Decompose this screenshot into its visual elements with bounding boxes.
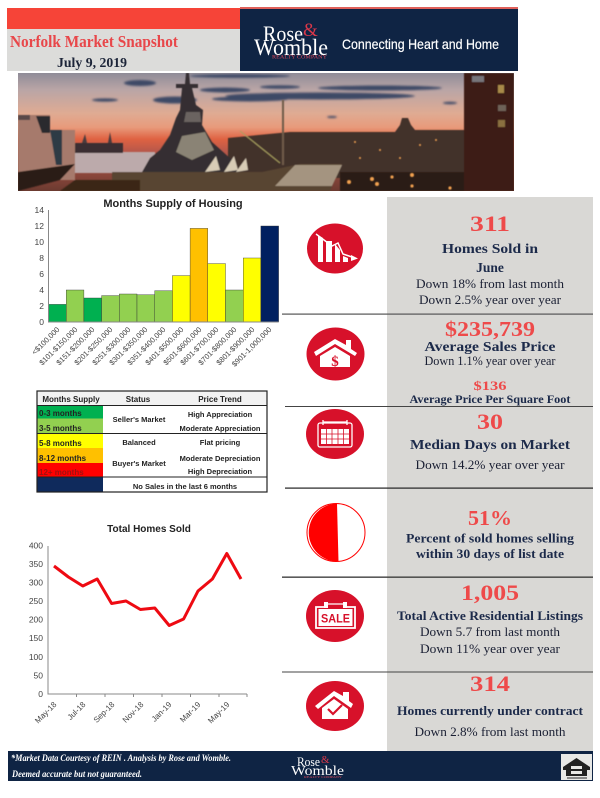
bar chart: months supply of housing: 8 — [39, 253, 44, 263]
bar chart: months supply of housing: $301-$350,000 — [107, 325, 149, 367]
icon: house with dollar sign: $ — [331, 354, 339, 370]
line chart: total homes sold: May-19 — [206, 700, 232, 725]
legend table: No Sales in the last 6 months — [133, 482, 237, 491]
logo: REALTY COMPANY — [272, 54, 327, 60]
legend table: Balanced — [122, 438, 156, 447]
icon: house with check — [306, 681, 364, 731]
line chart: total homes sold: 0 — [38, 689, 43, 699]
metric: under contract — [306, 671, 584, 739]
title: Norfolk Market Snapshot — [10, 32, 178, 51]
legend table: Status — [126, 395, 151, 404]
line chart: total homes sold: 200 — [29, 614, 43, 624]
line chart: total homes sold: 250 — [29, 596, 43, 606]
legend table: High Depreciation — [188, 467, 252, 476]
line chart: total homes sold: 400 — [29, 540, 43, 550]
metric: median days on market: Down 14.2% year over year — [416, 457, 565, 472]
logo: Womble — [254, 35, 328, 60]
line chart: total homes sold: 150 — [29, 633, 43, 643]
metric: homes sold: 311 — [470, 211, 510, 236]
bar chart: months supply of housing: $151-$200,000 — [54, 325, 96, 367]
chart title: Total Homes Sold — [107, 524, 191, 535]
metric: active listings: Total Active Residential Listings — [397, 609, 583, 623]
bar chart: months supply of housing — [30, 198, 279, 369]
icon: pie 51% — [307, 504, 365, 562]
metric: homes sold: Down 18% from last month — [416, 276, 565, 291]
footer logo: REALTY COMPANY — [304, 775, 343, 779]
date: July 9, 2019 — [57, 56, 127, 71]
hull — [112, 164, 342, 191]
metric: under contract: Homes currently under contract — [397, 704, 584, 718]
bar chart: months supply of housing: $801-$900,000 — [214, 325, 256, 367]
logo — [254, 20, 328, 60]
footer logo: Rose — [297, 754, 320, 769]
legend table: Moderate Depreciation — [180, 454, 261, 463]
metric: average sales price: Down 1.1% year over year — [424, 354, 556, 368]
mid buildings — [228, 118, 464, 178]
logo: Rose — [263, 21, 303, 46]
metric: active listings: Down 11% year over year — [420, 641, 561, 656]
disclaimer — [11, 753, 231, 779]
footer logo: Womble — [291, 764, 344, 779]
logo: & — [303, 20, 318, 41]
bar chart: months supply of housing: $351-$400,000 — [125, 325, 167, 367]
metric: median days on market: 30 — [477, 409, 503, 434]
legend table: Price Trend — [198, 395, 242, 404]
line chart: total homes sold — [29, 524, 247, 725]
disclaimer: *Market Data Courtesy of REIN . Analysis by Rose and Womble. — [11, 753, 231, 763]
bar chart: months supply of housing: 6 — [39, 269, 44, 279]
line chart: total homes sold: Jul-18 — [66, 700, 88, 722]
bar chart: months supply of housing: $901-1,000,000 — [230, 325, 273, 369]
legend table: 5-8 months — [39, 439, 82, 448]
metric: homes sold: June — [476, 260, 504, 275]
bar chart: months supply of housing: $701-$800,000 — [196, 325, 238, 367]
bar chart: months supply of housing: <$100,000 — [30, 325, 61, 357]
metric: homes sold: Down 2.5% year over year — [419, 292, 562, 307]
right column background — [387, 197, 593, 751]
metric: active listings: 1,005 — [461, 580, 519, 605]
metric: percent selling within 30 days: Percent of sold homes selling — [406, 532, 575, 546]
header left panel — [7, 8, 240, 71]
header right banner — [240, 7, 518, 71]
line chart: total homes sold: May-18 — [33, 700, 59, 725]
ship superstructure — [142, 73, 240, 172]
bar chart: months supply of housing: 10 — [35, 237, 44, 247]
tagline: Connecting Heart and Home — [342, 36, 499, 52]
bar chart: months supply of housing: $101-$150,000 — [37, 325, 79, 367]
legend table: 0-3 months — [39, 409, 82, 418]
legend table: Seller's Market — [113, 415, 166, 424]
line chart: total homes sold: Sep-18 — [92, 700, 117, 725]
bar chart: months supply of housing: 0 — [39, 317, 44, 327]
legend table: Moderate Appreciation — [180, 424, 261, 433]
metric: percent selling within 30 days: within 30 days of list date — [416, 547, 564, 561]
legend table — [37, 391, 267, 492]
footer — [8, 751, 593, 781]
quay — [340, 172, 464, 191]
metric: active listings: Down 5.7 from last month — [420, 624, 561, 639]
bar chart: months supply of housing: 4 — [39, 285, 44, 295]
legend table: 8-12 months — [39, 454, 87, 463]
footer logo — [291, 754, 344, 779]
bar chart: months supply of housing: $251-$300,000 — [90, 325, 132, 367]
icon: house with dollar sign — [306, 328, 364, 380]
metric: average sales price — [306, 317, 571, 406]
metric: average sales price: Average Price Per Square Foot — [410, 394, 571, 406]
legend table: 12+ months — [39, 468, 84, 477]
disclaimer: Deemed accurate but not guaranteed. — [11, 769, 142, 779]
metric: under contract: Down 2.8% from last month — [414, 724, 566, 739]
chart title: Months Supply of Housing — [103, 198, 243, 210]
bar chart: months supply of housing: $601-$700,000 — [178, 325, 220, 367]
metric: average sales price: Average Sales Price — [424, 339, 556, 354]
legend table: Months Supply — [42, 395, 100, 404]
legend table: Flat pricing — [200, 438, 241, 447]
bar chart: months supply of housing: $501-$600,000 — [161, 325, 203, 367]
metric: median days on market — [306, 409, 571, 472]
line chart: total homes sold: Jan-19 — [150, 700, 174, 724]
metric: percent selling within 30 days — [307, 504, 575, 562]
photo: battleship at sunset — [18, 73, 514, 191]
bar chart: months supply of housing: 14 — [35, 205, 44, 215]
legend table: Buyer's Market — [112, 459, 166, 468]
metric: percent selling within 30 days: 51% — [468, 506, 512, 530]
icon: falling bars — [307, 224, 363, 274]
line chart: total homes sold: 350 — [29, 559, 43, 569]
legend table: 3-5 months — [39, 424, 82, 433]
left building — [18, 115, 75, 180]
metric: homes sold: Homes Sold in — [442, 241, 539, 256]
bar chart: months supply of housing: 12 — [35, 221, 44, 231]
metric: under contract: 314 — [470, 671, 510, 696]
metric: median days on market: Median Days on Market — [410, 437, 571, 452]
icon: sale sign — [306, 590, 364, 642]
line chart: total homes sold: Mar-19 — [178, 700, 203, 724]
legend table: High Appreciation — [188, 410, 253, 419]
line chart: total homes sold: 50 — [34, 670, 43, 680]
metric: homes sold — [307, 211, 565, 307]
right building — [464, 73, 514, 191]
bar chart: months supply of housing: $401-$500,000 — [143, 325, 185, 367]
bar chart: months supply of housing: 2 — [39, 301, 44, 311]
icon: equal housing — [561, 754, 592, 780]
icon: sale sign: SALE — [321, 612, 350, 626]
metric: active listings — [306, 580, 583, 656]
line chart: total homes sold: 300 — [29, 578, 43, 588]
line chart: total homes sold: Nov-18 — [121, 700, 146, 725]
footer logo: & — [321, 754, 330, 766]
icon: calendar — [306, 409, 364, 459]
bar chart: months supply of housing: $201-$250,000 — [72, 325, 114, 367]
metric: average sales price: $235,739 — [445, 317, 535, 341]
metric: average sales price: $136 — [474, 378, 507, 393]
line chart: total homes sold: 100 — [29, 652, 43, 662]
water — [75, 152, 155, 173]
